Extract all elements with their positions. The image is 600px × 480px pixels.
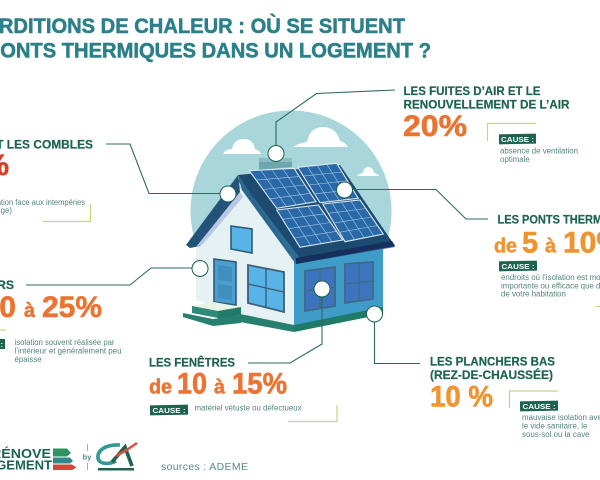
panel: murs: à bbox=[24, 300, 36, 322]
white front wall bbox=[196, 188, 294, 327]
panel: fuites d'air: RENOUVELLEMENT DE L’AIR bbox=[404, 100, 570, 112]
upper window bbox=[231, 226, 252, 253]
panel: ponts thermiques: à bbox=[545, 236, 557, 258]
panel: ponts thermiques: CAUSE : bbox=[502, 262, 534, 271]
panel: fenêtres: 10 bbox=[177, 368, 207, 400]
by separator bbox=[83, 444, 92, 470]
front window bbox=[248, 265, 284, 312]
entrance steps bbox=[183, 302, 241, 326]
gable roof bbox=[186, 175, 296, 264]
panel: planchers bas: 10 % bbox=[430, 381, 493, 414]
panel: murs: 25% bbox=[42, 291, 102, 324]
panel: murs: épaisse bbox=[14, 355, 42, 364]
foundation bbox=[240, 307, 383, 332]
panel: fuites d'air bbox=[403, 86, 578, 164]
panel: fenêtres bbox=[149, 357, 337, 422]
side windows bbox=[305, 262, 373, 311]
logo: crédit agricole bbox=[98, 443, 137, 470]
panel: fuites d'air: 20% bbox=[403, 110, 467, 143]
panel: fenêtres: à bbox=[214, 376, 226, 398]
panel: ponts thermiques: de votre habitation bbox=[501, 290, 566, 298]
by separator: by bbox=[83, 452, 92, 462]
panel: ponts thermiques bbox=[494, 214, 600, 306]
panel: ponts thermiques: de bbox=[494, 236, 517, 258]
door bbox=[214, 259, 236, 305]
panel: toiture et combles bbox=[0, 140, 93, 222]
chimney bbox=[259, 158, 292, 170]
panel: fenêtres: 15% bbox=[232, 368, 287, 400]
panel: planchers bas: sous-sol ou la cave bbox=[522, 430, 590, 439]
panel: fuites d'air: CAUSE : bbox=[501, 135, 534, 144]
panel: fuites d'air: absence de ventilation bbox=[500, 146, 578, 156]
panel: fenêtres: CAUSE : bbox=[152, 406, 186, 415]
panel: ponts thermiques: 5 bbox=[522, 226, 538, 260]
blue side wall bbox=[294, 248, 383, 327]
leader lines bbox=[26, 90, 488, 364]
panel: planchers bas: CAUSE : bbox=[522, 402, 556, 411]
panel: murs: isolation souvent réalisée par bbox=[14, 338, 115, 347]
panel: planchers bas bbox=[430, 356, 600, 439]
source: sources : ADEME bbox=[161, 461, 248, 473]
title bbox=[0, 14, 431, 62]
panel: fenêtres: matériel vétuste ou défectueux bbox=[194, 404, 302, 412]
house illustration bbox=[183, 110, 395, 332]
panel: planchers bas: le vide sanitaire, le bbox=[522, 422, 588, 430]
panel: fuites d'air: LES FUITES D’AIR ET LE bbox=[404, 86, 541, 98]
panel: murs: l’intérieur et généralement peu bbox=[14, 346, 122, 356]
panel: fenêtres: LES FENÊTRES bbox=[149, 357, 235, 370]
marker dots bbox=[192, 146, 382, 322]
panel: planchers bas: LES PLANCHERS BAS bbox=[430, 356, 555, 368]
panel: planchers bas: (REZ-DE-CHAUSSÉE) bbox=[430, 369, 553, 382]
panel: fenêtres: de bbox=[149, 376, 172, 398]
side roof bbox=[238, 165, 395, 264]
solar panels bbox=[249, 163, 383, 247]
background circle with clouds bbox=[190, 110, 392, 312]
panel: fuites d'air: optimale bbox=[500, 155, 530, 164]
panel: murs bbox=[0, 280, 122, 364]
logo: rénove logement bbox=[0, 446, 76, 472]
roof eave band bbox=[296, 241, 395, 264]
